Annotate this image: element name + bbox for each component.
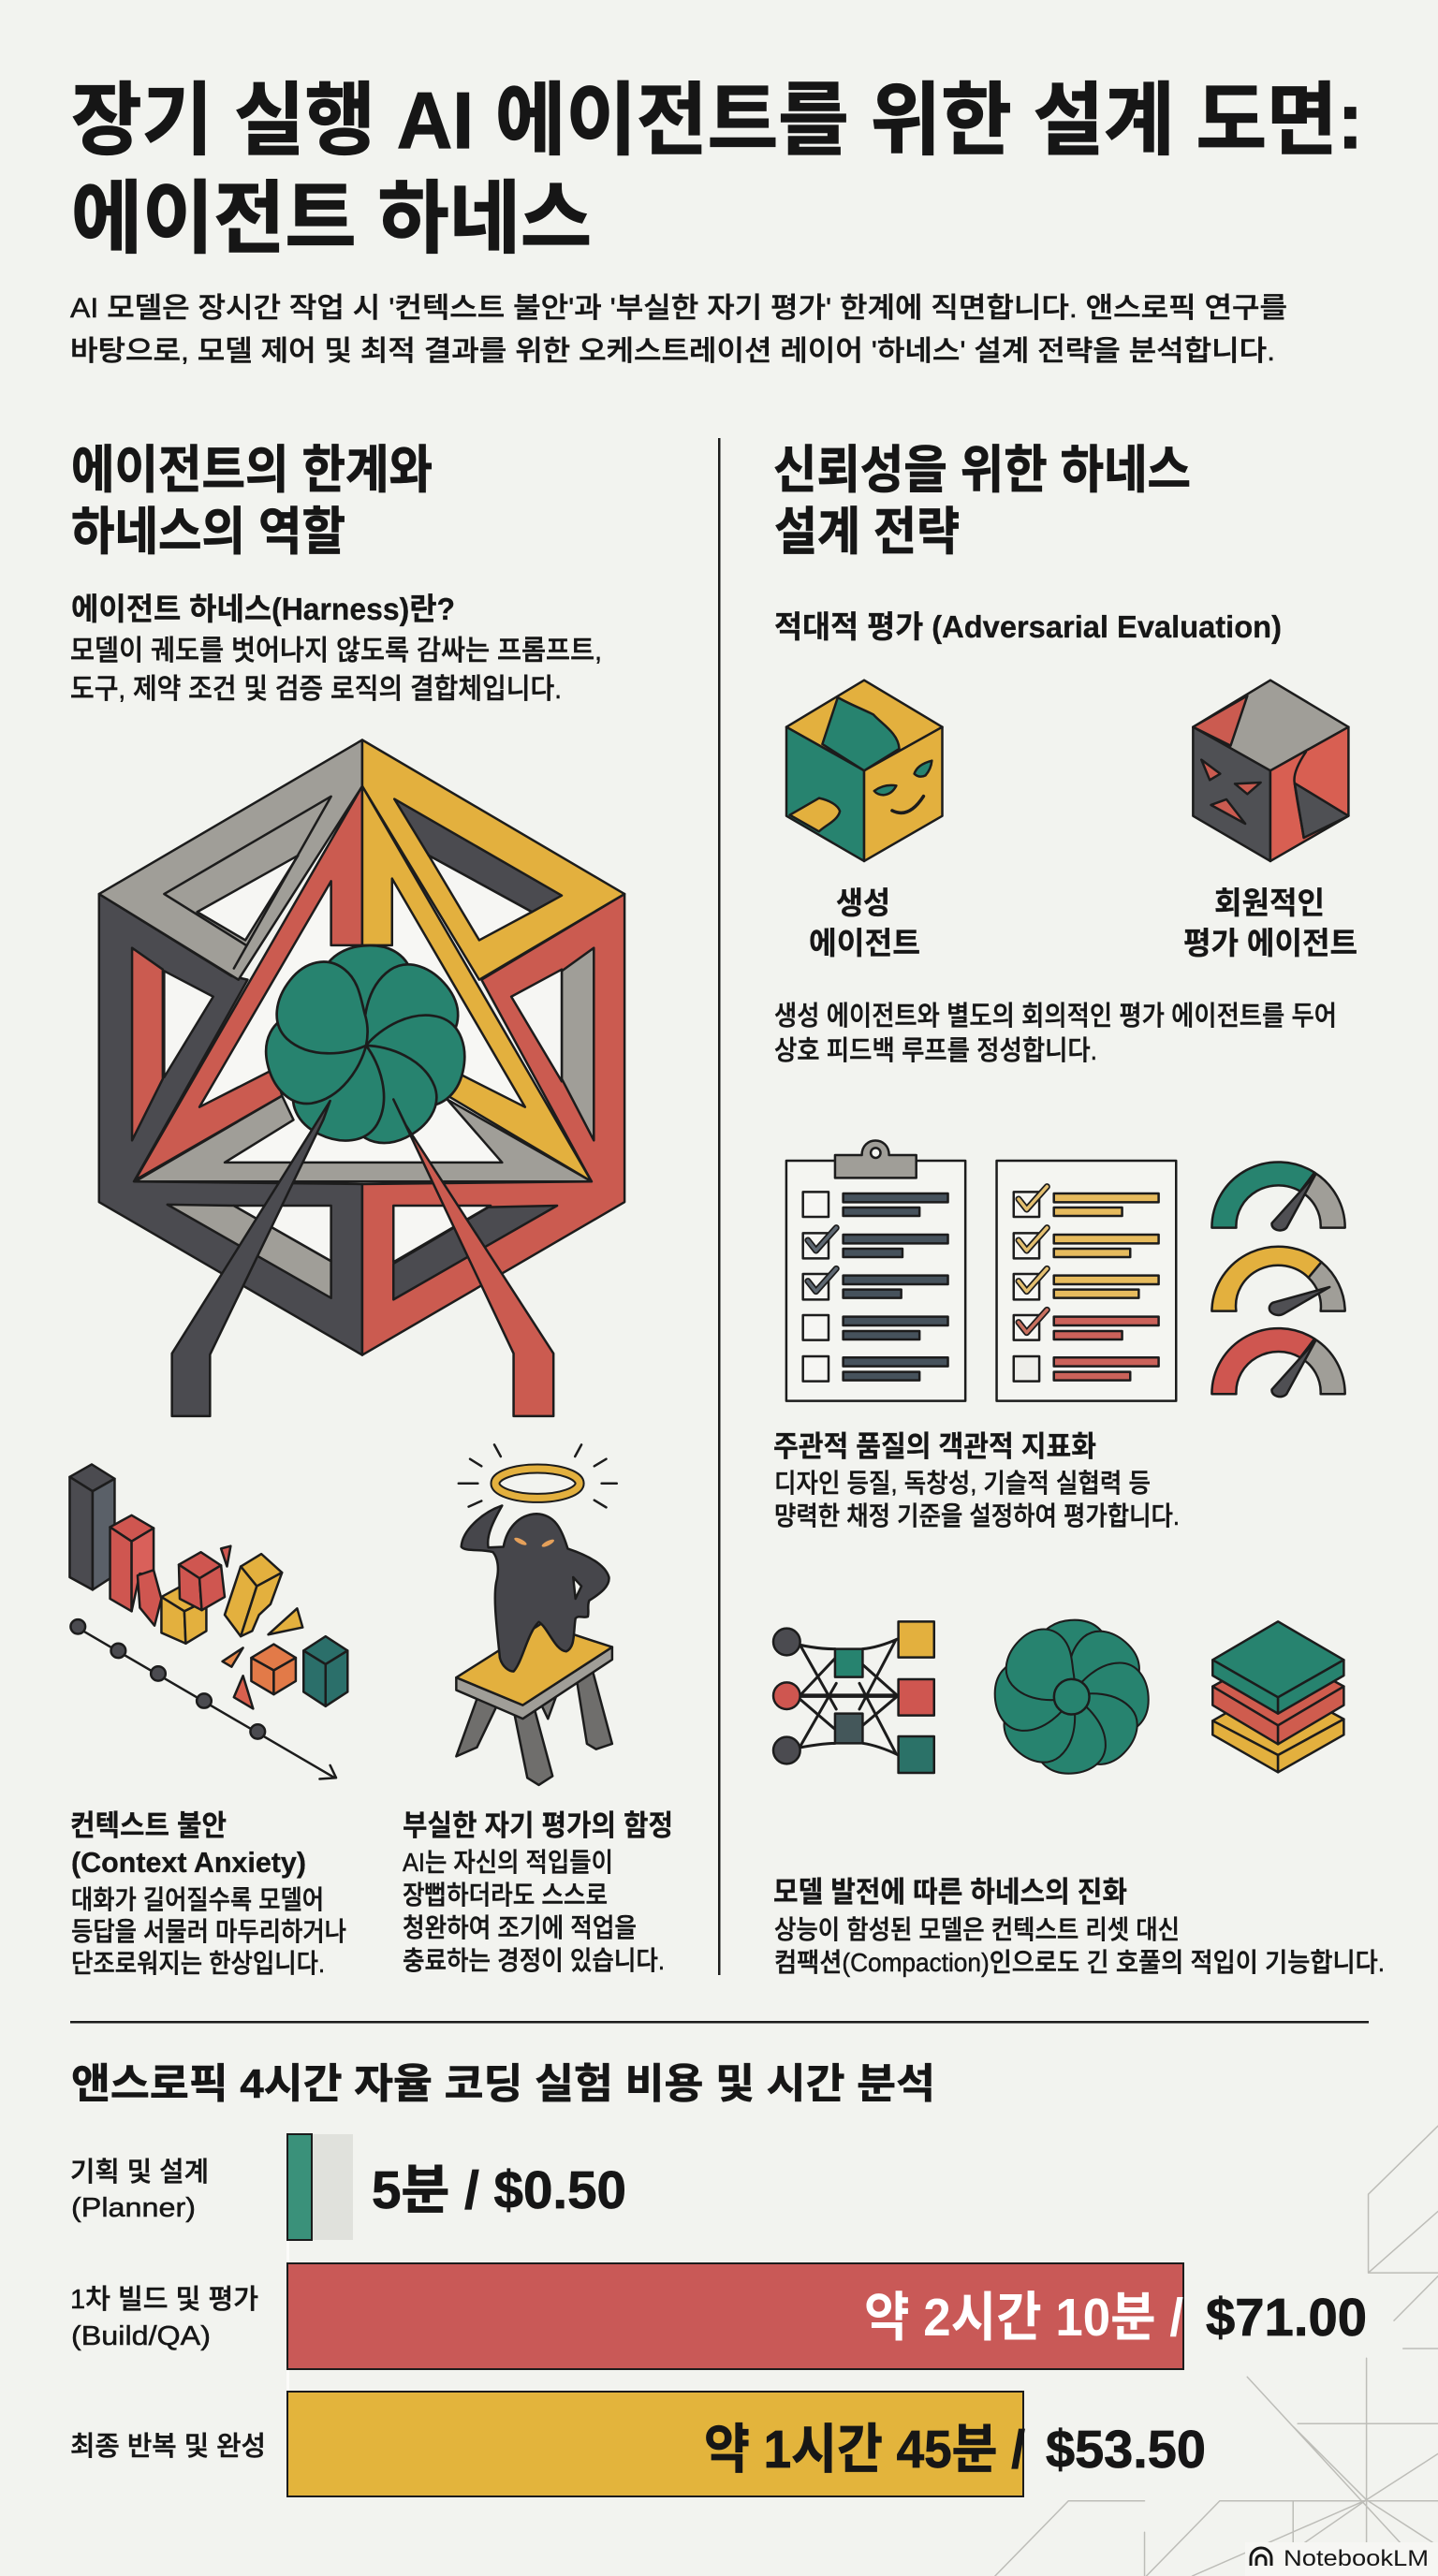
icon: central flower [258,945,474,1156]
icon: scoring checklist [997,1161,1176,1401]
text: context anxiety: (Context Anxiety) [71,1846,306,1879]
icon: layer stack [1212,1621,1343,1772]
agent labels: 회원적인 [1214,886,1325,920]
text: context anxiety: 대화가 길어질수록 모델어 [71,1885,324,1914]
row: build and QA: $71.00 [1206,2288,1367,2348]
text: adversarial description: 생성 에이전트와 별도의 회의적인 평가 에이전트를 두어 [774,1001,1337,1032]
subheading: adversarial evaluation: 적대적 평가 (Adversarial Evaluation) [774,609,1282,644]
text: harness evolution [773,1876,1385,1977]
text: context anxiety: 단조로워지는 한상입니다. [71,1949,325,1978]
row: build and QA: 약 2시간 10분 / [864,2288,1183,2348]
text: harness evolution: 모델 발전에 따른 하네스의 진화 [773,1876,1127,1909]
row: build and QA: (Build/QA) [71,2321,211,2351]
left section heading: 에이전트의 한계와 [71,441,433,499]
row: final iteration: $53.50 [1046,2420,1206,2480]
text: harness evolution: 상능이 함성된 모델은 컨텍스트 리셋 대신 [774,1915,1180,1944]
text: context anxiety: 컨텍스트 불안 [70,1809,227,1842]
text: objective metrics [773,1430,1180,1530]
title: 장기 실행 AI 에이전트를 위한 설계 도면: [71,77,1363,166]
illustration: context anxiety falling bars [69,1464,347,1778]
agent labels [809,886,1357,960]
text: context anxiety [70,1809,346,1978]
text: self evaluation trap: 부실한 자기 평가의 함정 [403,1809,673,1842]
row: final iteration: 약 1시간 45분 / [704,2420,1025,2480]
title [71,77,1363,264]
text: objective metrics: 주관적 품질의 객관적 지표화 [773,1430,1096,1463]
illustration: impossible hexagon harness [99,740,624,1416]
text: adversarial description [774,1001,1337,1066]
icon: generator agent cube [786,681,943,861]
text: self evaluation trap: 청완하여 조기에 적업을 [403,1913,637,1942]
icon: network [773,1621,934,1773]
right section heading: 설계 전략 [774,503,960,561]
text: self evaluation trap [403,1809,673,1975]
bar chart: time and cost [70,2134,1367,2496]
icon: critic agent cube [1193,681,1348,861]
intro text: AI 모델은 장시간 작업 시 '컨텍스트 불안'과 '부실한 자기 평가' 한계에 직면합니다. 앤스로픽 연구를 [70,293,1287,324]
chart heading: 앤스로픽 4시간 자율 코딩 실험 비용 및 시간 분석 [71,2061,935,2107]
right section heading: 신뢰성을 위한 하네스 [773,441,1191,499]
NotebookLM logo [1245,2542,1438,2576]
text: objective metrics: 디자인 등질, 독창성, 기슬적 실협력 등 [774,1469,1151,1498]
text: context anxiety: 등답을 서물러 마두리하거나 [71,1917,346,1946]
row: final iteration: 최종 반복 및 완성 [70,2431,266,2462]
text: self evaluation trap: AI는 자신의 적입들이 [403,1848,613,1877]
row: build and QA [70,2263,1367,2369]
title: 에이전트 하네스 [71,175,592,264]
row: final iteration [70,2392,1206,2496]
row: planner: (Planner) [71,2193,196,2223]
text: harness evolution: 컴팩션(Compaction)인으로도 긴 호풀의 적입이 기능합니다. [774,1948,1385,1977]
agent labels: 평가 에이전트 [1183,926,1357,960]
left section heading: 하네스의 역할 [71,503,345,561]
row: planner: 기획 및 설계 [70,2157,209,2188]
row: planner: 5분 / $0.50 [372,2160,626,2220]
icon: gauges [1211,1162,1345,1397]
right section heading [773,441,1191,561]
icon: small flower [992,1617,1151,1776]
harness definition: 도구, 제약 조건 및 검증 로직의 결합체입니다. [70,674,562,705]
intro text [70,293,1287,367]
text: adversarial description: 상호 피드백 루프를 정성합니다. [774,1035,1097,1066]
harness definition: 모델이 궤도를 벗어나지 않도록 감싸는 프롬프트, [70,636,602,666]
harness reins [172,1099,553,1416]
illustration: halo figure on stool [456,1444,617,1785]
text: self evaluation trap: 장뻡하더라도 스스로 [403,1881,608,1910]
text: objective metrics: 먕력한 채정 기준을 설정하여 평가합니다. [774,1501,1180,1530]
row: planner [70,2134,626,2240]
text: self evaluation trap: 충료하는 경정이 있습니다. [403,1946,665,1975]
NotebookLM logo: NotebookLM [1284,2546,1429,2571]
harness definition [70,592,602,705]
left section heading [71,441,433,561]
row: build and QA: 1차 빌드 및 평가 [70,2284,258,2315]
intro text: 바탕으로, 모델 제어 및 최적 결과를 위한 오케스트레이션 레이어 '하네스' 설계 전략을 분석합니다. [70,336,1275,367]
harness definition: 에이전트 하네스(Harness)란? [71,592,455,626]
icon: clipboard checklist [786,1140,965,1401]
agent labels: 생성 [836,886,890,920]
agent labels: 에이전트 [809,926,920,960]
